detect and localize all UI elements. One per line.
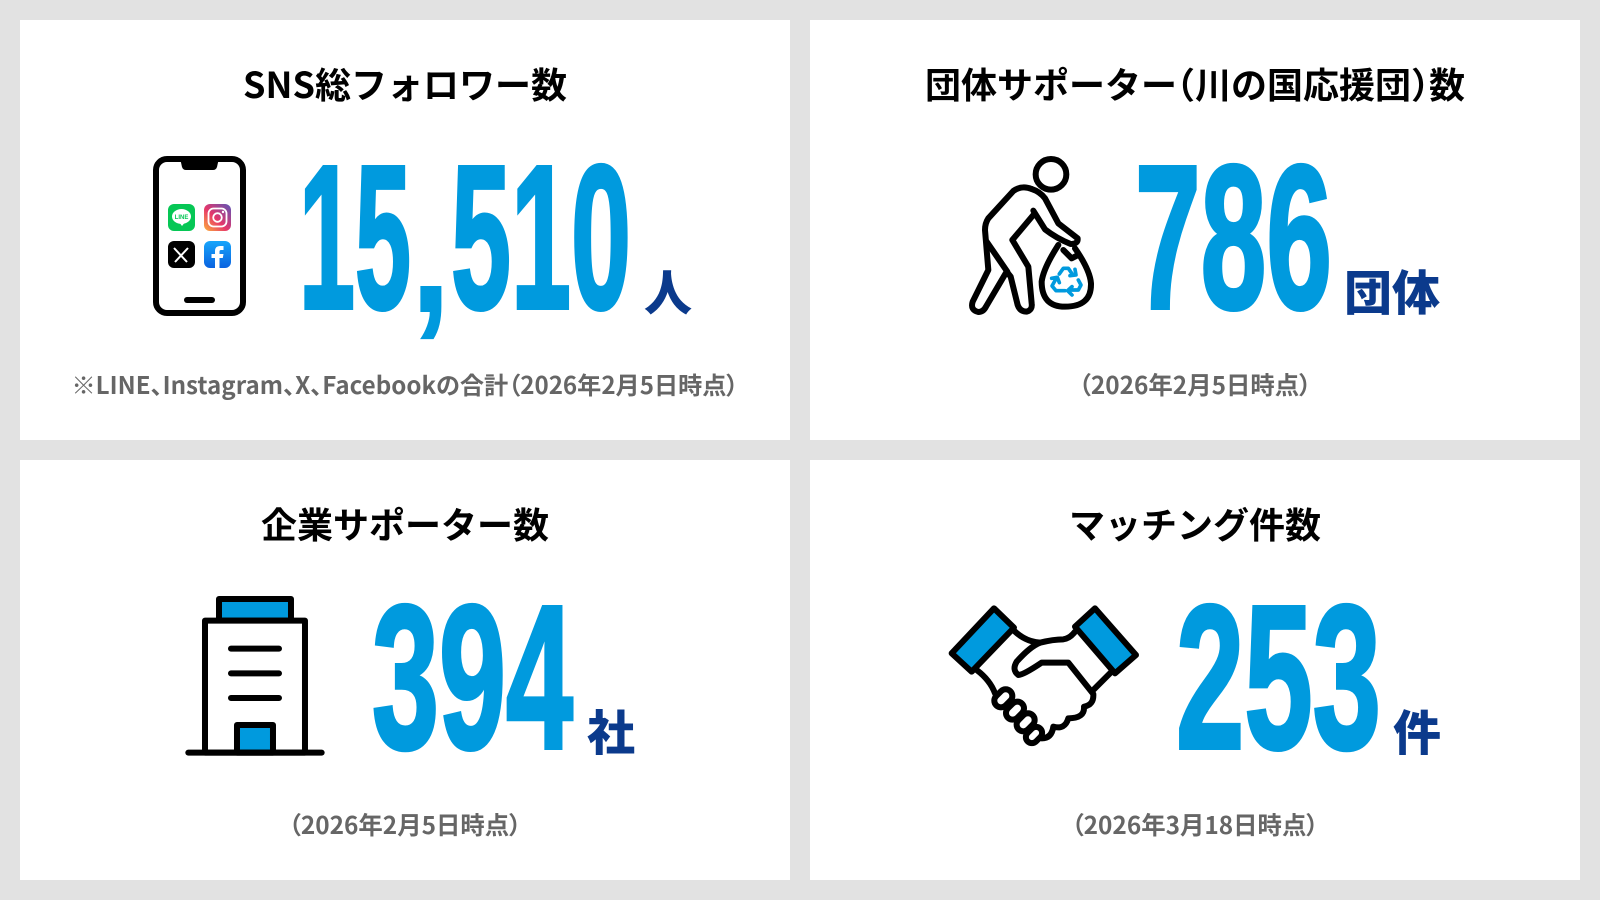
panel: SNS followers (20, 20, 790, 440)
unit: companies: 社 (587, 694, 635, 764)
big number: 253: 253 (1176, 563, 1381, 792)
icon: office building (188, 599, 322, 753)
caption: date: （2026年2月5日時点） (289, 807, 521, 842)
unit: groups: 団体 (1344, 254, 1440, 324)
panel: corporate supporters (20, 460, 790, 880)
big number: 15,510: , (410, 155, 451, 350)
icon: smartphone with app icons: LINE (175, 215, 188, 221)
big number: 15,510: 15 (299, 123, 411, 352)
caption: date: （2026年3月18日時点） (1071, 807, 1319, 842)
heading: corporate supporters: 企業サポーター数 (261, 497, 549, 549)
heading: supporter groups: 団体サポーター（川の国応援団）数 (925, 57, 1465, 109)
big number: 15,510 (299, 123, 631, 352)
panel: supporter groups (810, 20, 1580, 440)
big number: 15,510: 510 (451, 123, 631, 352)
unit: people: 人 (644, 254, 692, 324)
heading: SNS followers: SNS総フォロワー数 (243, 57, 567, 109)
unit: cases: 件 (1393, 694, 1441, 764)
big number: 786: 786 (1135, 123, 1332, 352)
icon: person collecting a recycling bag (972, 159, 1091, 312)
caption: note: ※LINE、Instagram、X、Facebookの合計（2026年2月5日時点） (72, 366, 738, 401)
icon: handshake (952, 608, 1136, 746)
icon: smartphone with app icons (156, 158, 243, 313)
big number: 394: 394 (372, 563, 573, 792)
heading: matching count: マッチング件数 (1069, 497, 1321, 549)
caption: date: （2026年2月5日時点） (1079, 367, 1311, 402)
panel: matching count (810, 460, 1580, 880)
